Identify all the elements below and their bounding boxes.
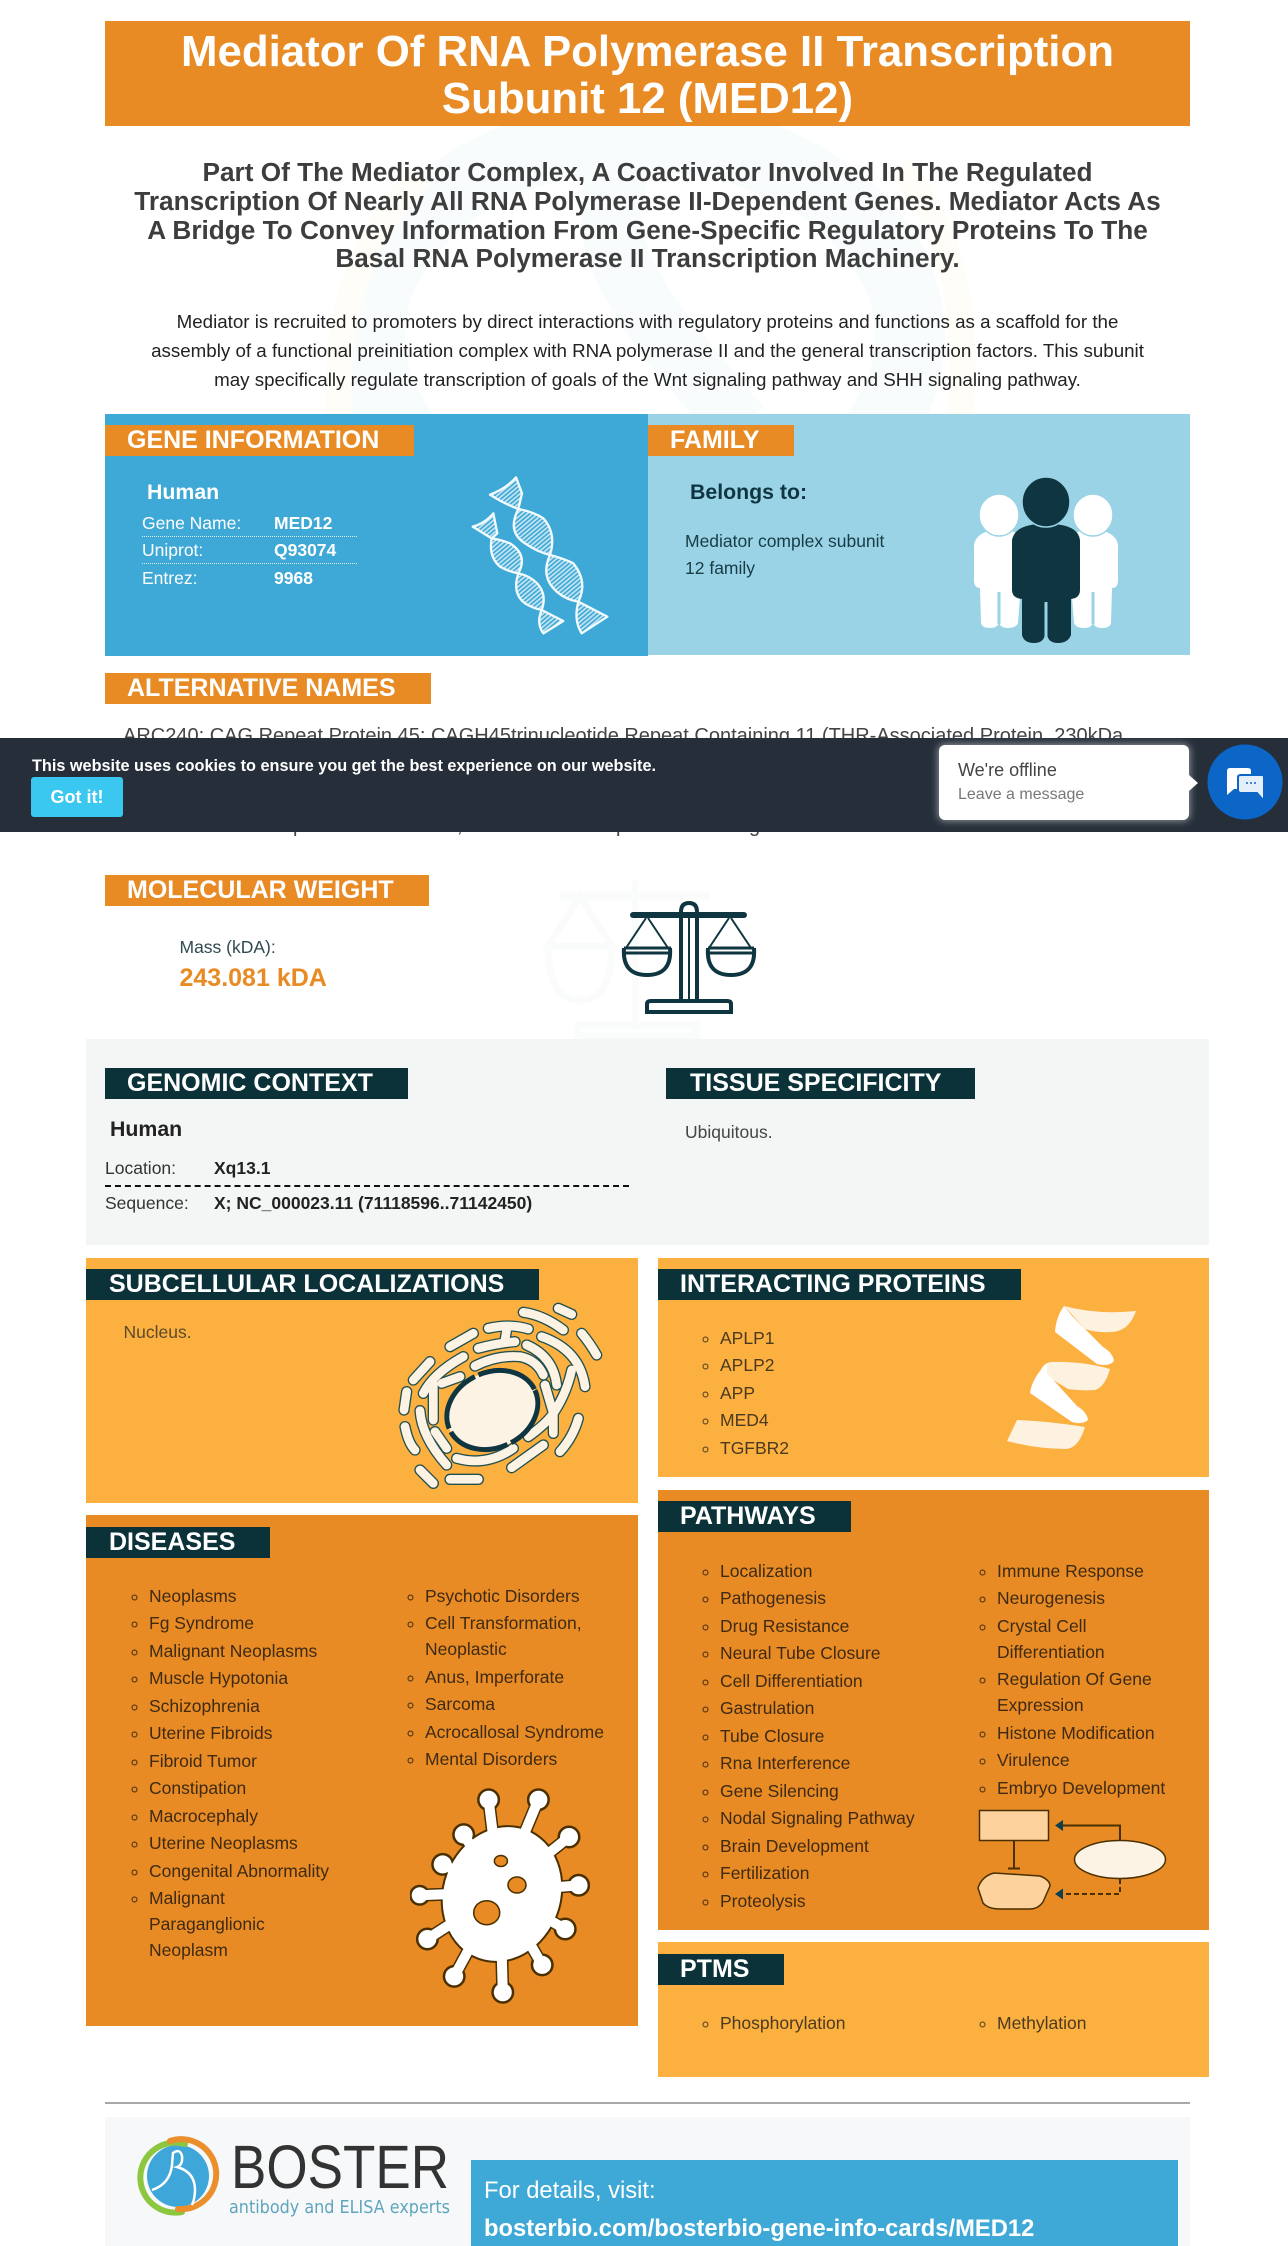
pathways list, first column: Cell Differentiation [720, 1671, 863, 1691]
diseases list, first column: Uterine Fibroids [149, 1723, 273, 1743]
heading: molecular weight: MOLECULAR WEIGHT [127, 876, 394, 904]
pathways list, second column: Virulence [997, 1750, 1070, 1770]
species label: Human [147, 480, 219, 504]
pathways list, first column: Pathogenesis [720, 1588, 826, 1608]
heading: diseases: DISEASES [109, 1528, 235, 1556]
protein list: APLP2 [720, 1355, 774, 1375]
button: got it [31, 777, 123, 817]
belongs to label: Belongs to: [690, 480, 807, 504]
protein list: APLP1 [720, 1328, 774, 1348]
pathways list, second column: Differentiation [997, 1642, 1105, 1662]
chat pointer [1189, 775, 1198, 791]
diseases list, first column: Schizophrenia [149, 1696, 260, 1716]
chat card [939, 745, 1189, 820]
pathways list, first column: Gene Silencing [720, 1781, 839, 1801]
alternative names text: p [293, 815, 304, 837]
diseases list, first column [132, 1586, 329, 1960]
description: Mediator is recruited to promoters by direct interactions with regulatory proteins and functions as a scaffold for the [177, 311, 1118, 332]
ptm item: phosphorylation: Phosphorylation [720, 2013, 846, 2033]
description: assembly of a functional preinitiation complex with RNA polymerase II and the general transcription factors. This subunit [151, 340, 1144, 361]
diseases list, second column: Cell Transformation, [425, 1613, 582, 1633]
subtitle: Transcription Of Nearly All RNA Polymerase II-Dependent Genes. Mediator Acts As [134, 186, 1161, 216]
diseases list, first column: Congenital Abnormality [149, 1861, 329, 1881]
panel: ptms [658, 1942, 1209, 2077]
alternative names text: p [616, 815, 627, 837]
pathways list, first column: Tube Closure [720, 1726, 824, 1746]
heading: genomic context: GENOMIC CONTEXT [127, 1069, 373, 1097]
background watermark logo [310, 126, 990, 426]
details url: bosterbio.com/bosterbio-gene-info-cards/MED12 [484, 2215, 1034, 2242]
subtitle [134, 157, 1161, 273]
diseases list, first column: Fibroid Tumor [149, 1751, 257, 1771]
heading: ptms: PTMS [680, 1955, 749, 1983]
description [151, 311, 1144, 390]
mass label: Mass (kDA): [180, 937, 276, 957]
icon: balance scale [622, 901, 756, 1014]
diseases list, second column [408, 1586, 604, 1769]
heading: subcellular localizations: SUBCELLULAR LOCALIZATIONS [109, 1270, 504, 1298]
tissue text: Ubiquitous. [685, 1122, 773, 1142]
diseases list, first column: Uterine Neoplasms [149, 1833, 298, 1853]
heading: ptms [658, 1954, 784, 1985]
pathways list, second column: Histone Modification [997, 1723, 1155, 1743]
chat prompt: Leave a message [958, 786, 1084, 803]
subtitle: Part Of The Mediator Complex, A Coactivator Involved In The Regulated [202, 157, 1093, 187]
panel: interacting proteins [658, 1258, 1209, 1477]
gene fields: Entrez: [142, 568, 197, 588]
logo: boster [137, 2133, 450, 2218]
panel: pathways [658, 1490, 1209, 1930]
pathways list, first column: Brain Development [720, 1836, 869, 1856]
title [105, 21, 1190, 126]
alternative names text: ARC240; CAG Repeat Protein 45; CAGH45trinucleotide Repeat Containing 11 (THR-Associated Protein, 230kDa [123, 725, 1123, 747]
icon: cell nucleus [398, 1302, 602, 1489]
heading: gene information: GENE INFORMATION [127, 426, 379, 454]
diseases list, second column: Acrocallosal Syndrome [425, 1722, 604, 1742]
gene fields: Q93074 [274, 540, 336, 560]
pathways list, first column: Drug Resistance [720, 1616, 849, 1636]
pathways list, second column [980, 1561, 1166, 1798]
family text [685, 531, 884, 578]
diseases list, first column: Fg Syndrome [149, 1613, 254, 1633]
pathways list, second column: Immune Response [997, 1561, 1144, 1581]
ptm item: methylation: Methylation [997, 2013, 1086, 2033]
heading: tissue specificity: TISSUE SPECIFICITY [690, 1069, 941, 1097]
alternative names text: g [749, 815, 760, 837]
species label: Human [110, 1117, 182, 1141]
diseases list, second column: Neoplastic [425, 1639, 507, 1659]
subtitle: A Bridge To Convey Information From Gene-Specific Regulatory Proteins To The [147, 215, 1148, 245]
pathways list, second column: Regulation Of Gene [997, 1669, 1152, 1689]
diseases list, first column: Malignant [149, 1888, 225, 1908]
protein list: MED4 [720, 1410, 769, 1430]
pathways list, first column: Localization [720, 1561, 812, 1581]
pathways list, second column: Crystal Cell [997, 1616, 1086, 1636]
location row: Location: [105, 1158, 176, 1178]
diseases list, first column: Neoplasms [149, 1586, 237, 1606]
icon: ghost scale [535, 875, 715, 1040]
pathways list, second column: Expression [997, 1695, 1084, 1715]
sequence row: Sequence: [105, 1193, 189, 1213]
location row: Xq13.1 [214, 1158, 270, 1178]
gene fields [142, 513, 357, 588]
localization text: Nucleus. [124, 1322, 192, 1342]
diseases list, first column: Malignant Neoplasms [149, 1641, 317, 1661]
subtitle: Basal RNA Polymerase II Transcription Machinery. [335, 243, 960, 273]
gene fields: Gene Name: [142, 513, 241, 533]
heading: interacting proteins: INTERACTING PROTEINS [680, 1270, 986, 1298]
protein list: TGFBR2 [720, 1438, 789, 1458]
diseases list, second column: Psychotic Disorders [425, 1586, 580, 1606]
pathways list, first column: Rna Interference [720, 1753, 850, 1773]
pathways list, first column: Neural Tube Closure [720, 1643, 880, 1663]
mass value: 243.081 kDA [180, 964, 327, 992]
icon: dna helix [472, 476, 608, 634]
icon: chat button [1208, 744, 1282, 820]
diseases list, first column: Muscle Hypotonia [149, 1668, 288, 1688]
diseases list, second column: Mental Disorders [425, 1749, 557, 1769]
pathways list, second column: Neurogenesis [997, 1588, 1105, 1608]
pathways list, first column: Nodal Signaling Pathway [720, 1808, 915, 1828]
protein list: APP [720, 1383, 755, 1403]
cookie message: This website uses cookies to ensure you get the best experience on our website. [32, 757, 656, 775]
diseases list, first column: Constipation [149, 1778, 246, 1798]
description: may specifically regulate transcription of goals of the Wnt signaling pathway and SHH signaling pathway. [214, 369, 1081, 390]
gene fields: 9968 [274, 568, 313, 588]
heading: family [648, 425, 794, 456]
panel: footer [105, 2117, 1190, 2246]
icon: virus [410, 1788, 590, 2004]
heading: family: FAMILY [670, 426, 759, 454]
diseases list, second column: Anus, Imperforate [425, 1667, 564, 1687]
diseases list, first column: Macrocephaly [149, 1806, 258, 1826]
icon: people [974, 478, 1118, 643]
panel: genomic context and tissue specificity [86, 1039, 1209, 1245]
pathways list, second column: Embryo Development [997, 1778, 1165, 1798]
location row [105, 1158, 270, 1178]
icon: protein ribbon [1007, 1306, 1136, 1449]
protein list [702, 1328, 789, 1458]
details label: For details, visit: [484, 2177, 656, 2204]
details box [471, 2160, 1178, 2246]
diseases list, second column: Sarcoma [425, 1694, 495, 1714]
alternative names text: , [457, 815, 463, 837]
chat status: We're offline [958, 760, 1057, 780]
icon: pathway diagram [977, 1810, 1166, 1910]
alternative names text [123, 725, 1123, 837]
gene fields: Uniprot: [142, 540, 203, 560]
family text: Mediator complex subunit [685, 531, 884, 551]
panel: subcellular localizations [86, 1258, 638, 1503]
pathways list, first column: Gastrulation [720, 1698, 814, 1718]
heading: pathways: PATHWAYS [680, 1502, 816, 1530]
gene fields: MED12 [274, 513, 332, 533]
button: got it: Got it! [50, 787, 103, 807]
title: Mediator Of RNA Polymerase II Transcription [181, 27, 1114, 76]
family text: 12 family [685, 558, 755, 578]
heading: alternative names: ALTERNATIVE NAMES [127, 674, 396, 702]
pathways list, first column: Proteolysis [720, 1891, 806, 1911]
panel: gene information [105, 414, 648, 656]
heading: diseases [86, 1527, 270, 1558]
pathways list, first column [702, 1561, 915, 1911]
panel: family [648, 414, 1190, 655]
cookie banner [0, 738, 1288, 832]
pathways list, first column: Fertilization [720, 1863, 809, 1883]
title: Subunit 12 (MED12) [442, 74, 853, 123]
diseases list, first column: Paraganglionic [149, 1914, 265, 1934]
panel: diseases [86, 1515, 638, 2026]
heading: pathways [658, 1501, 851, 1532]
sequence row: X; NC_000023.11 (71118596..71142450) [214, 1193, 532, 1213]
diseases list, first column: Neoplasm [149, 1940, 228, 1960]
